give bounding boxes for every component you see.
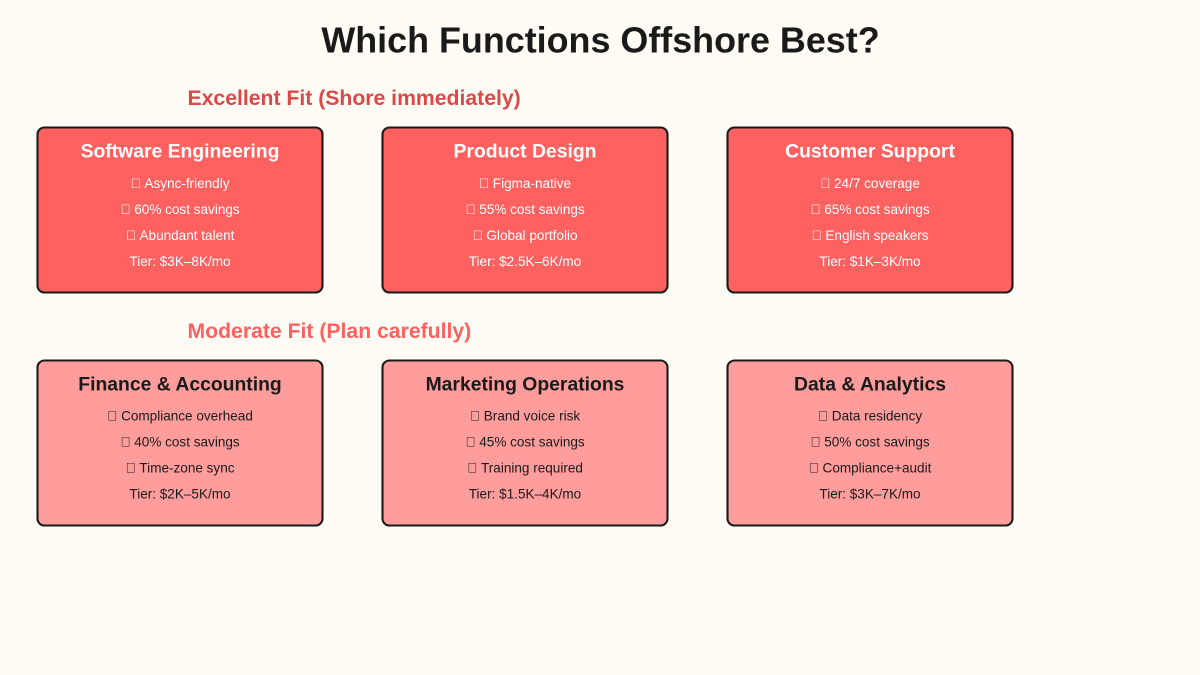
panel: product design: Product Design	[454, 140, 596, 162]
panel: data and analytics	[728, 360, 1012, 526]
panel: marketing operations:  Brand voice risk	[470, 408, 580, 424]
panel: data and analytics:  Data residency	[818, 408, 922, 424]
panel: data and analytics: Data & Analytics	[794, 374, 946, 396]
panel: marketing operations:  Training required	[467, 460, 583, 476]
panel: software engineering:  60% cost savings	[120, 202, 240, 217]
panel: finance and accounting:  Time-zone sync	[125, 460, 235, 476]
panel: product design:  Figma-native	[479, 176, 571, 191]
panel: software engineering:  Async-friendly	[130, 176, 230, 191]
panel: customer support: Tier: $1K–3K/mo	[819, 254, 921, 269]
panel: software engineering:  Abundant talent	[126, 228, 235, 243]
panel: marketing operations:  45% cost savings	[465, 434, 585, 450]
panel: customer support: Customer Support	[785, 140, 955, 162]
panel: software engineering: Software Engineering	[81, 140, 279, 162]
panel: customer support:  24/7 coverage	[820, 176, 920, 191]
heading: moderate fit: Moderate Fit (Plan carefully)	[188, 320, 471, 343]
panel: data and analytics: Tier: $3K–7K/mo	[819, 486, 921, 502]
panel: product design:  Global portfolio	[472, 228, 578, 243]
panel: data and analytics:  Compliance+audit	[809, 460, 932, 476]
title: Which Functions Offshore Best?	[321, 20, 880, 60]
heading: excellent fit: Excellent Fit (Shore immediately)	[188, 87, 521, 110]
panel: product design	[382, 128, 668, 292]
panel: finance and accounting	[38, 360, 322, 526]
panel: customer support:  English speakers	[811, 228, 929, 243]
panel: marketing operations	[382, 360, 668, 526]
panel: marketing operations: Marketing Operations	[426, 374, 624, 396]
panel: software engineering: Tier: $3K–8K/mo	[129, 254, 231, 269]
panel: finance and accounting: Finance & Accounting	[78, 374, 282, 396]
panel: software engineering	[38, 128, 322, 292]
panel: product design: Tier: $2.5K–6K/mo	[469, 254, 581, 269]
panel: customer support	[728, 128, 1012, 292]
panel: product design:  55% cost savings	[465, 202, 585, 217]
panel: finance and accounting:  Compliance overhead	[107, 408, 253, 424]
panel: finance and accounting: Tier: $2K–5K/mo	[129, 486, 231, 502]
panel: data and analytics:  50% cost savings	[810, 434, 930, 450]
panel: marketing operations: Tier: $1.5K–4K/mo	[469, 486, 581, 502]
panel: customer support:  65% cost savings	[810, 202, 930, 217]
panel: finance and accounting:  40% cost savings	[120, 434, 240, 450]
